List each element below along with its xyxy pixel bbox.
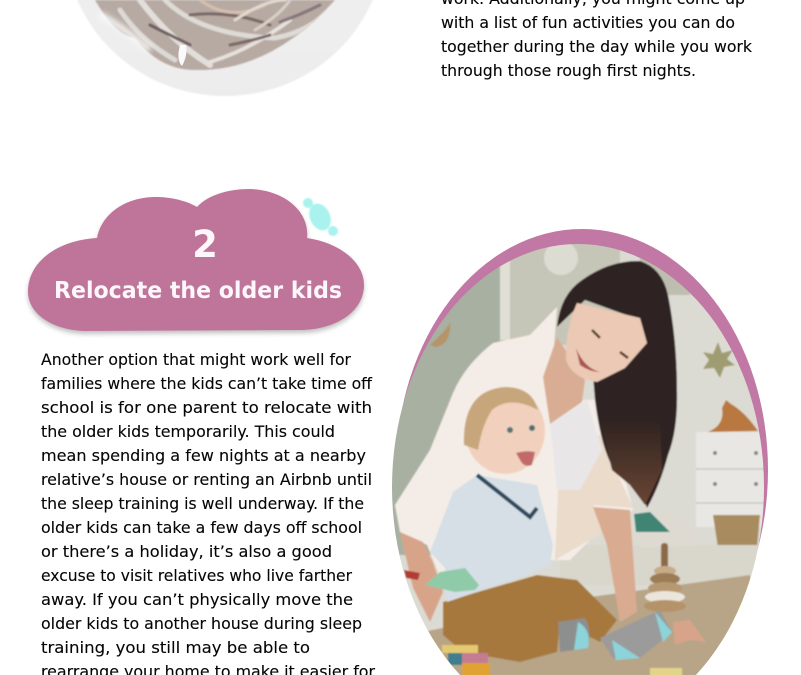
text block: step 2 body: Another option that might work well for [41, 350, 351, 369]
text block: continuation of step 1: through those rough first nights. [441, 61, 696, 80]
heading cloud: step 2: 2 [192, 223, 218, 266]
text block: step 2 body: away. If you can’t physically move the [41, 590, 353, 609]
text block: step 2 body: school is for one parent to relocate with [41, 398, 372, 417]
stacking rings toy [644, 543, 686, 612]
floor [717, 544, 758, 548]
mother hair ends [604, 430, 662, 506]
mother robe [395, 307, 633, 600]
text block: step 2 body: older kids to another house during sleep [41, 614, 362, 633]
mother right hand [673, 620, 706, 645]
room background [392, 244, 762, 632]
text block: continuation of step 1: together during the day while you work [441, 37, 753, 56]
baby head [468, 402, 546, 474]
wooden blocks [442, 645, 682, 675]
text block: step 2 body: the sleep training is well underway. If the [41, 494, 364, 513]
icon: cyan dots [303, 198, 338, 236]
text block: step 2 body [41, 350, 375, 675]
text block: step 2 body: mean spending a few nights at a nearby [41, 446, 366, 465]
text block: continuation of step 1: with a list of fun activities you can do [441, 13, 735, 32]
photo frame: pink oval [396, 229, 768, 675]
mother arm [593, 507, 637, 622]
baby pants [443, 575, 617, 662]
photo: bird nest in white bowl [65, 0, 385, 96]
mother hair [557, 261, 677, 508]
toy fox [708, 400, 758, 432]
photo: mother and baby playing [385, 235, 775, 675]
text block: step 2 body: families where the kids can’t take time off [41, 374, 373, 393]
heading cloud: step 2 [28, 189, 364, 334]
text block: step 2 body: older kids can take a few days off school [41, 518, 362, 537]
baby sweater [430, 475, 553, 602]
text block: step 2 body: relative’s house or renting an Airbnb until [41, 470, 372, 489]
wall star [703, 342, 735, 378]
green toy [425, 568, 479, 592]
text block: step 2 body: training, you still may be able to [41, 638, 310, 657]
heading cloud: step 2: Relocate the older kids [54, 276, 342, 304]
text block: continuation of step 1 [441, 0, 753, 80]
mother neck and top [543, 337, 585, 424]
mother face [566, 303, 647, 382]
mother hand [400, 532, 443, 622]
dresser [696, 432, 768, 527]
basket [713, 515, 760, 548]
text block: step 2 body: the older kids temporarily. This could [41, 422, 335, 441]
text block: step 2 body: excuse to visit relatives who live farther [41, 566, 352, 585]
text block: step 2 body: or there’s a holiday, it’s also a good [41, 542, 332, 561]
baby socks [558, 618, 589, 652]
